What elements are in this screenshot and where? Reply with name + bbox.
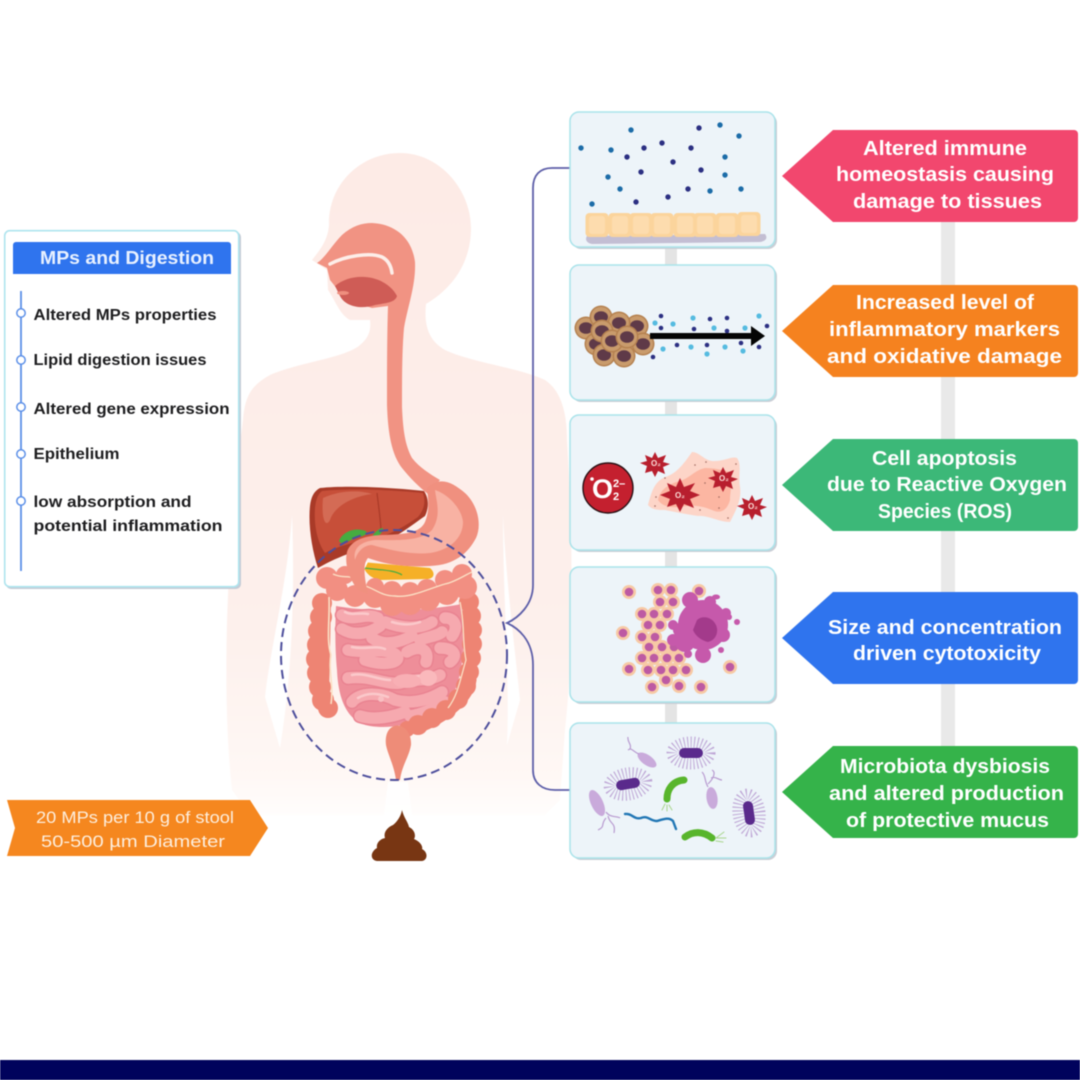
icon: superoxide badge: 2 [613,491,619,503]
label: cytotoxicity: driven cytotoxicity [853,643,1042,665]
esophagus and oral cavity [317,223,440,494]
list text: Epithelium [34,446,120,463]
label: microbiota dysbiosis: of protective mucus [846,810,1049,832]
epithelial cells [586,212,766,244]
liver [309,487,428,568]
ROS labels: O₂ [675,491,685,500]
dark particles [624,125,704,205]
small intestine [335,604,464,727]
ROS labels: O₂ [719,474,729,483]
list text: potential inflammation [34,518,223,535]
label: cell apoptosis: Cell apoptosis [872,448,1017,470]
list text: Altered gene expression [34,401,229,418]
ROS labels: O₂ [651,459,661,468]
pancreas [362,562,434,580]
fuzzy purple bacteria [607,742,763,833]
toxic cell [667,592,740,663]
card 5: microbiota [570,723,777,860]
label: inflammatory markers: and oxidative damage [827,346,1062,368]
icon: superoxide badge: 2– [613,478,625,490]
bracket connector [507,168,570,790]
label: cytotoxicity: Size and concentration [828,617,1062,639]
blue spirochete [625,814,676,829]
label: cell apoptosis [782,439,1078,531]
timeline [17,291,25,571]
stomach [346,481,479,594]
ROS labels [651,459,758,511]
icon: superoxide badge [583,463,633,513]
label: immune homeostasis: Altered immune [863,138,1027,160]
callout: stool microplastics [7,800,268,856]
panel: MPs and Digestion [5,231,241,589]
label: microbiota dysbiosis: Microbiota dysbiosis [840,756,1050,778]
icon: stool [372,810,426,861]
lavender bacteria [586,737,722,833]
released particles [651,314,769,359]
label: inflammatory markers: inflammatory markers [829,319,1060,341]
healthy cells [616,583,737,694]
list text: low absorption and [34,494,192,511]
ROS labels: O₂ [748,502,758,511]
label: immune homeostasis: homeostasis causing [836,164,1054,186]
card 3: reactive oxygen species [570,415,777,552]
teal particles [578,122,744,207]
icon: superoxide badge: O [592,474,613,504]
callout: stool microplastics: 20 MPs per 10 g of stool [36,808,234,827]
list text [34,307,229,535]
damaged cell [648,452,740,522]
label: cell apoptosis: Species (ROS) [878,501,1012,523]
cell cluster [574,306,654,368]
card 4: cytotoxicity [570,567,777,704]
panel heading: MPs and Digestion [40,248,214,268]
callout: stool microplastics: 50-500 µm Diameter [41,832,225,851]
green bacteria [662,780,726,842]
list text: Altered MPs properties [34,307,217,324]
label: cytotoxicity [782,592,1078,684]
label: immune homeostasis [782,130,1078,222]
card 1: particles over epithelium [570,112,777,249]
grey link between cards [665,245,677,725]
card 2: inflammatory cell release [570,265,777,402]
list text: Lipid digestion issues [34,352,207,369]
label: immune homeostasis: damage to tissues [853,191,1042,213]
arrow [650,326,765,346]
label: inflammatory markers: Increased level of [856,292,1034,314]
gallbladder [339,530,367,543]
dashed circle highlight [281,530,507,780]
panel heading [13,242,231,274]
ROS stars [640,452,767,520]
large intestine [306,564,482,737]
grey link between labels [941,220,955,750]
label: microbiota dysbiosis [782,746,1078,838]
label: cell apoptosis: due to Reactive Oxygen [827,474,1067,496]
label: microbiota dysbiosis: and altered production [829,783,1064,805]
human body silhouette [226,153,572,815]
rectum [386,726,411,780]
label: inflammatory markers [782,285,1078,377]
bottom bar [0,1060,1080,1080]
